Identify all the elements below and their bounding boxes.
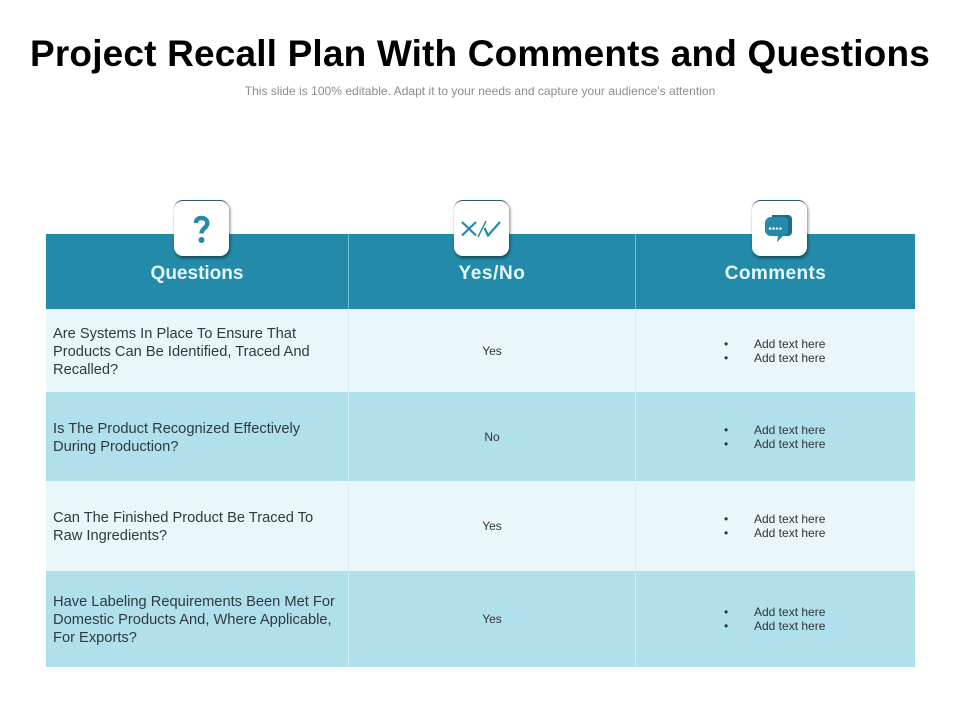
subtitle: This slide is 100% editable. Adapt it to your needs and capture your audience's attention xyxy=(245,84,715,98)
row 3 background xyxy=(46,481,915,571)
header: Yes/No: Yes/No xyxy=(459,263,525,284)
row 3 question: Can The Finished Product Be Traced To xyxy=(53,510,313,526)
row 2 comments xyxy=(724,423,825,451)
row 3 comments: Add text here xyxy=(754,526,825,540)
row 1 background xyxy=(46,309,915,392)
row 4 comments xyxy=(724,605,825,633)
row 2 question xyxy=(53,421,300,455)
row 2 comments: Add text here xyxy=(754,423,825,437)
row 3 comments xyxy=(724,512,825,540)
row 3 comments: Add text here xyxy=(754,512,825,526)
row 4 comments: Add text here xyxy=(754,605,825,619)
column divider: questions and yes/no xyxy=(348,234,349,667)
row 3 question: Raw Ingredients? xyxy=(53,528,167,544)
row 4 question: Domestic Products And, Where Applicable, xyxy=(53,612,332,628)
header: Questions: Questions xyxy=(151,263,243,284)
row 2 question: During Production? xyxy=(53,439,178,455)
row 1 comments: • xyxy=(724,337,728,351)
icon: speech bubbles xyxy=(752,200,807,256)
table header band xyxy=(46,234,915,309)
row 4 question: For Exports? xyxy=(53,630,137,646)
row 1 question: Are Systems In Place To Ensure That xyxy=(53,326,296,342)
row 4 comments: Add text here xyxy=(754,619,825,633)
row 4 question: Have Labeling Requirements Been Met For xyxy=(53,594,335,610)
row 4 answer: Yes xyxy=(482,612,502,626)
row 1 comments: Add text here xyxy=(754,351,825,365)
row 2 background xyxy=(46,392,915,481)
row 1 comments: Add text here xyxy=(754,337,825,351)
row 3 question xyxy=(53,510,313,544)
icon: cross and check xyxy=(454,200,509,256)
row 2 answer: No xyxy=(484,430,500,444)
row 4 question xyxy=(53,594,335,646)
row 1 comments: • xyxy=(724,351,728,365)
row 1 question xyxy=(53,326,310,378)
row 1 answer: Yes xyxy=(482,344,502,358)
row 4 background xyxy=(46,571,915,667)
row 3 comments: • xyxy=(724,526,728,540)
icon: question mark xyxy=(174,200,229,256)
row 1 question: Products Can Be Identified, Traced And xyxy=(53,344,310,360)
title: Project Recall Plan With Comments and Questions xyxy=(30,33,930,74)
row 3 comments: • xyxy=(724,512,728,526)
row 2 comments: • xyxy=(724,423,728,437)
row 2 question: Is The Product Recognized Effectively xyxy=(53,421,300,437)
row 4 comments: • xyxy=(724,619,728,633)
row 1 comments xyxy=(724,337,825,365)
row 2 comments: • xyxy=(724,437,728,451)
row 3 answer: Yes xyxy=(482,519,502,533)
row 4 comments: • xyxy=(724,605,728,619)
column divider: yes/no and comments xyxy=(635,234,636,667)
header: Comments: Comments xyxy=(725,263,826,284)
row 1 question: Recalled? xyxy=(53,362,118,378)
row 2 comments: Add text here xyxy=(754,437,825,451)
